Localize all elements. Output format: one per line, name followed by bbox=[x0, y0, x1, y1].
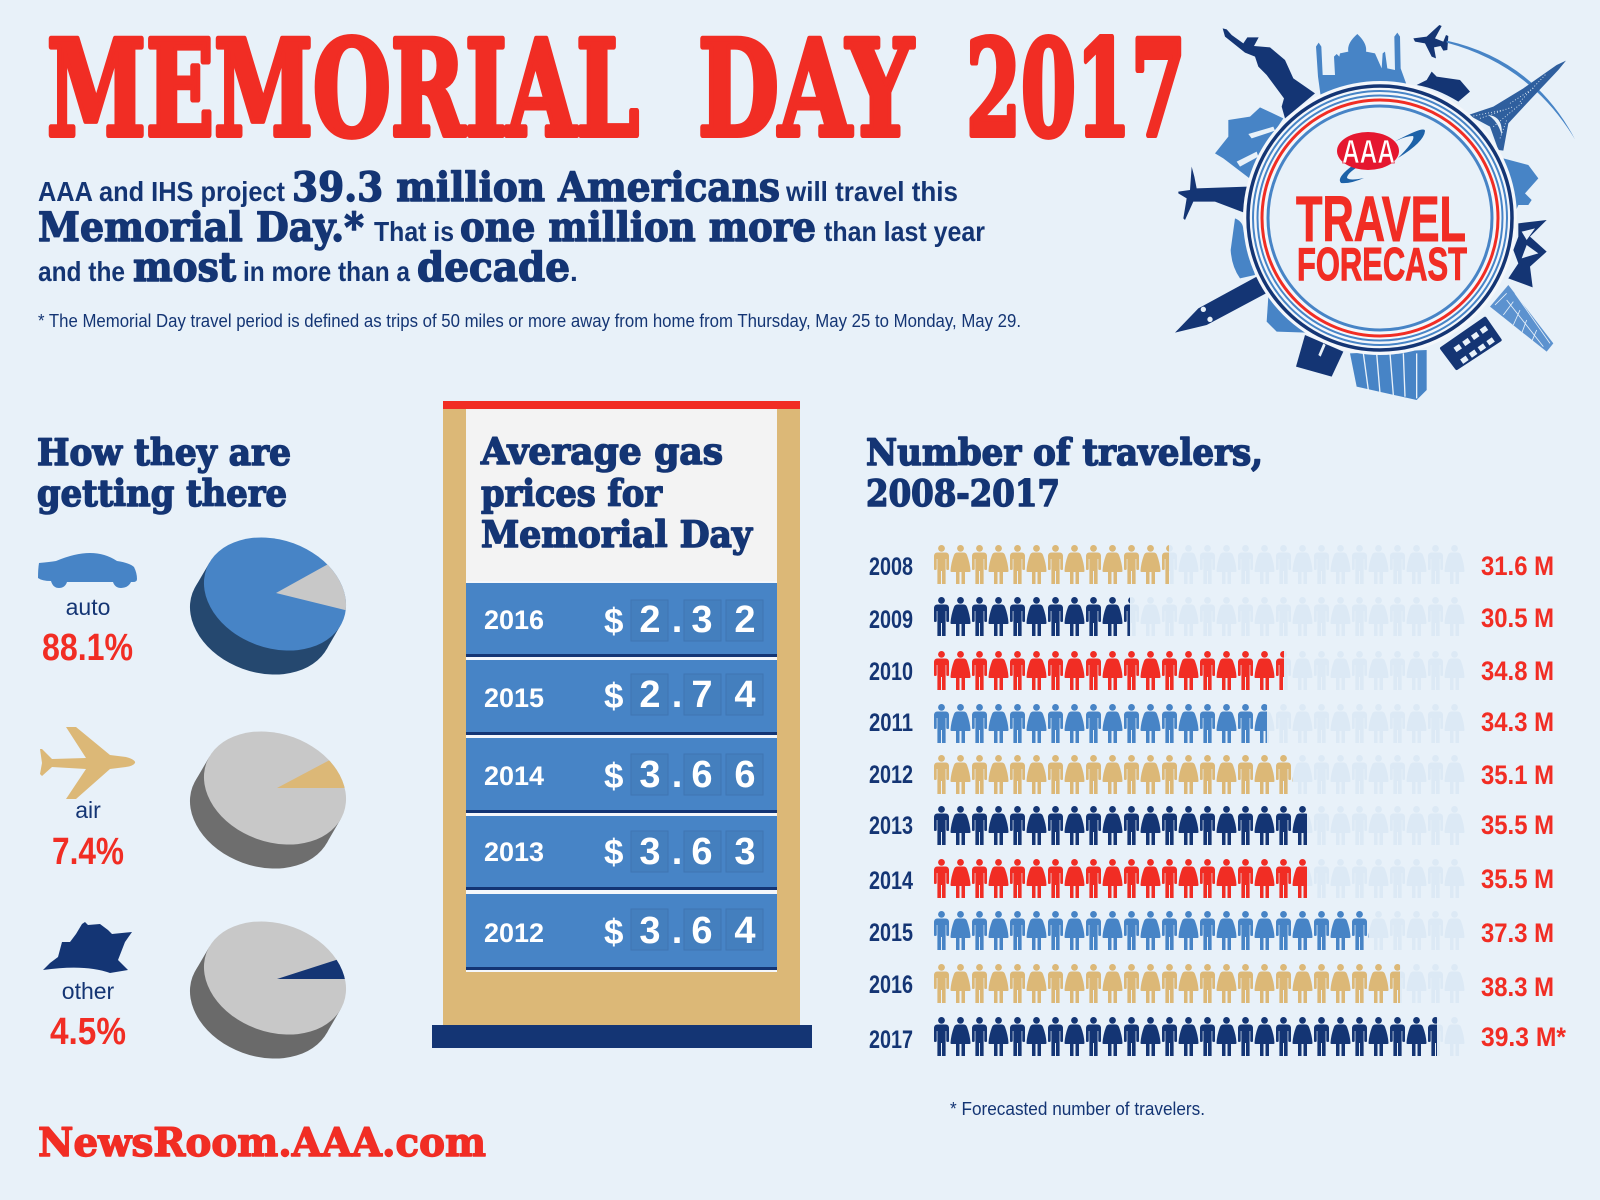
row 2015: 37.3 M bbox=[1481, 918, 1554, 948]
row 2015: 2 bbox=[639, 674, 661, 716]
badge: travel forecast bbox=[1175, 25, 1575, 400]
row 2013: 6 bbox=[691, 831, 713, 873]
row 2016: 3 bbox=[691, 599, 713, 641]
row 2012: 2012 bbox=[869, 761, 913, 789]
row 2011 bbox=[869, 704, 1554, 743]
row 2015: 2015 bbox=[869, 919, 913, 947]
icon: plane bbox=[40, 727, 135, 799]
AAA logo: AAA bbox=[1342, 133, 1395, 170]
heading: number of travelers: 2008-2017 bbox=[866, 473, 1060, 515]
pie chart: other bbox=[190, 922, 346, 1058]
row 2013: 2013 bbox=[484, 837, 544, 867]
row 2016: 2 bbox=[639, 599, 661, 641]
AAA logo bbox=[1337, 130, 1425, 183]
row 2016: 2016 bbox=[484, 605, 544, 635]
pie chart: auto bbox=[190, 538, 346, 674]
row 2009: 2009 bbox=[869, 606, 913, 634]
row 2016: . bbox=[672, 599, 682, 641]
row 2010 bbox=[869, 651, 1554, 690]
row 2008: 31.6 M bbox=[1481, 551, 1554, 581]
leaning tower bbox=[1490, 285, 1553, 352]
gas heading: Memorial Day bbox=[481, 514, 753, 556]
icon: ship bbox=[43, 922, 132, 973]
row 2013: 3 bbox=[734, 831, 756, 873]
row 2014 bbox=[869, 859, 1554, 898]
row 2009 bbox=[869, 597, 1554, 636]
footer link: NewsRoom.AAA.com bbox=[38, 1120, 486, 1166]
row 2012: $ bbox=[604, 913, 623, 952]
title: 2017 bbox=[966, 12, 1186, 167]
row 2014: 35.5 M bbox=[1481, 864, 1554, 894]
row 2014: . bbox=[672, 754, 682, 796]
landmarks around the badge bbox=[1175, 25, 1575, 400]
row 2017: 2017 bbox=[869, 1026, 913, 1054]
intro text: one million more bbox=[460, 204, 816, 251]
pie chart: air bbox=[190, 732, 346, 868]
row 2011: 2011 bbox=[869, 709, 913, 737]
row 2012: 2012 bbox=[484, 918, 544, 948]
row 2012: 6 bbox=[691, 910, 713, 952]
row 2014: 2014 bbox=[869, 867, 913, 895]
intro text bbox=[38, 164, 985, 291]
red top bar bbox=[443, 401, 800, 409]
white heading panel bbox=[466, 409, 777, 583]
row 2008: 2008 bbox=[869, 553, 913, 581]
navy base bbox=[432, 1025, 812, 1048]
badge text: FORECAST bbox=[1297, 238, 1467, 290]
heading: how they are getting there bbox=[37, 432, 291, 515]
value: 7.4% bbox=[52, 831, 124, 873]
row 2013: 2013 bbox=[869, 812, 913, 840]
row 2012: 35.1 M bbox=[1481, 760, 1554, 790]
badge rings bbox=[1243, 81, 1517, 355]
intro text: than last year bbox=[824, 216, 985, 247]
icon: car bbox=[38, 553, 137, 588]
heading: how they are getting there: How they are bbox=[37, 432, 291, 474]
row 2008 bbox=[869, 545, 1554, 584]
badge text: TRAVEL bbox=[1296, 183, 1466, 255]
intro text: in more than a bbox=[243, 256, 410, 287]
row 2013 bbox=[869, 806, 1554, 845]
panel: other share bbox=[43, 922, 346, 1058]
intro text: AAA and IHS project bbox=[38, 176, 285, 207]
panel: auto share bbox=[38, 538, 346, 674]
row 2015: . bbox=[672, 674, 682, 716]
row 2012: . bbox=[672, 910, 682, 952]
gold sign frame bbox=[443, 401, 800, 1025]
row 2016: 38.3 M bbox=[1481, 972, 1554, 1002]
row 2016 bbox=[869, 964, 1554, 1003]
row 2012 bbox=[869, 755, 1554, 794]
row 2016: $ bbox=[604, 602, 623, 641]
label: auto bbox=[66, 594, 110, 620]
heading: how they are getting there: getting there bbox=[37, 473, 287, 515]
row 2015: 2015 bbox=[484, 683, 544, 713]
row 2017 bbox=[869, 1017, 1566, 1056]
badge text bbox=[1296, 183, 1467, 290]
row 2015: $ bbox=[604, 677, 623, 716]
row 2009: 30.5 M bbox=[1481, 603, 1554, 633]
row 2014: 2014 bbox=[484, 761, 544, 791]
row 2011: 34.3 M bbox=[1481, 707, 1554, 737]
title: MEMORIAL bbox=[47, 12, 639, 167]
footnote: travel period: * The Memorial Day travel period is defined as trips of 50 miles or more away from home from Thursday, May 25 to Monday, May 29. bbox=[38, 311, 1021, 331]
gas heading bbox=[480, 431, 753, 556]
row 2017: 39.3 M* bbox=[1481, 1022, 1566, 1052]
panel: gas prices bbox=[432, 401, 812, 1048]
row 2014: $ bbox=[604, 757, 623, 796]
row 2015: 7 bbox=[691, 674, 713, 716]
footnote: forecast: * Forecasted number of travelers. bbox=[950, 1099, 1205, 1119]
row 2016 bbox=[466, 583, 777, 657]
label: air bbox=[75, 797, 101, 823]
row 2016: 2016 bbox=[869, 971, 913, 999]
intro text: and the bbox=[38, 256, 125, 287]
row 2013: $ bbox=[604, 833, 623, 872]
intro text: That is bbox=[374, 216, 454, 247]
pictogram chart: travelers by year bbox=[869, 545, 1566, 1056]
intro text: . bbox=[570, 256, 578, 287]
row 2015 bbox=[466, 660, 777, 735]
row 2014: 3 bbox=[639, 754, 661, 796]
row 2013: 35.5 M bbox=[1481, 810, 1554, 840]
row 2014: 6 bbox=[734, 754, 756, 796]
gas heading: prices for bbox=[481, 473, 663, 515]
intro text: decade bbox=[417, 244, 570, 291]
row 2016: 2 bbox=[734, 599, 756, 641]
intro text: 39.3 million Americans bbox=[292, 164, 780, 211]
row 2010: 34.8 M bbox=[1481, 656, 1554, 686]
row 2014: 6 bbox=[691, 754, 713, 796]
row 2015 bbox=[869, 911, 1554, 950]
row 2013 bbox=[466, 816, 777, 890]
title: DAY bbox=[698, 12, 914, 167]
value: 88.1% bbox=[42, 627, 133, 669]
label: other bbox=[62, 978, 115, 1004]
heading: number of travelers bbox=[866, 432, 1263, 515]
row 2013: 3 bbox=[639, 831, 661, 873]
row 2012: 3 bbox=[639, 910, 661, 952]
row 2015: 4 bbox=[734, 674, 756, 716]
white separators bbox=[466, 581, 777, 972]
heading: number of travelers: Number of travelers, bbox=[866, 432, 1263, 474]
row 2014 bbox=[466, 738, 777, 813]
row 2012: 4 bbox=[734, 910, 756, 952]
intro text: will travel this bbox=[785, 176, 958, 207]
row 2012 bbox=[466, 894, 777, 970]
gas heading: Average gas bbox=[480, 431, 723, 473]
value: 4.5% bbox=[50, 1011, 126, 1053]
Eiffel tower lattice bbox=[1468, 61, 1566, 151]
intro text: Memorial Day.* bbox=[38, 204, 364, 251]
row 2010: 2010 bbox=[869, 658, 913, 686]
row 2013: . bbox=[672, 831, 682, 873]
intro text: most bbox=[133, 244, 236, 291]
panel: air share bbox=[40, 727, 346, 868]
